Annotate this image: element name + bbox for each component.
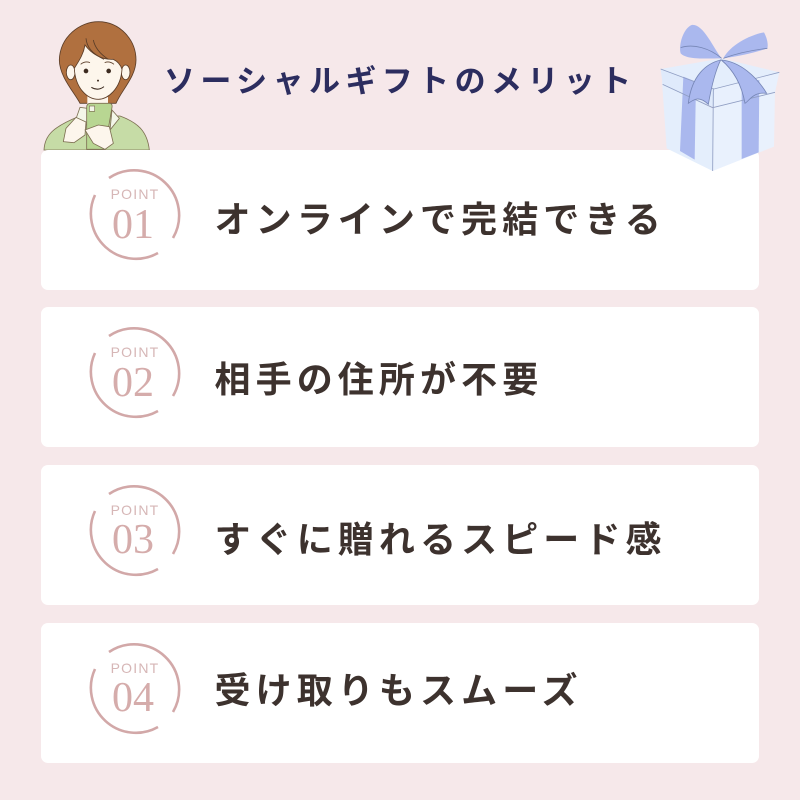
badge: point 02: [90, 327, 180, 418]
badge: point 04: [90, 643, 180, 734]
badge: point 03: POINT: [111, 502, 159, 518]
label: point 04: 受け取りもスムーズ: [214, 670, 583, 711]
panel: point 04: [41, 623, 759, 763]
illustration: woman holding smartphone: [44, 21, 150, 150]
illustration: gift box with blue ribbon: [660, 24, 780, 171]
label: point 02: 相手の住所が不要: [214, 359, 543, 400]
panel: point 02: [41, 307, 759, 447]
panel: point 03: [41, 465, 759, 605]
panel: point 01: [41, 150, 759, 290]
badge: point 01: 01: [112, 202, 154, 248]
badge: point 04: 04: [112, 675, 154, 721]
badge: point 01: [90, 169, 180, 260]
label: point 01: オンラインで完結できる: [214, 199, 666, 240]
badge: point 01: POINT: [111, 186, 159, 202]
badge: point 03: 03: [112, 517, 154, 563]
badge: point 03: [90, 485, 180, 576]
title: ソーシャルギフトのメリット: [164, 64, 637, 99]
label: point 03: すぐに贈れるスピード感: [214, 519, 667, 560]
badge: point 02: 02: [112, 360, 154, 406]
badge: point 04: POINT: [111, 660, 159, 676]
badge: point 02: POINT: [111, 344, 159, 360]
